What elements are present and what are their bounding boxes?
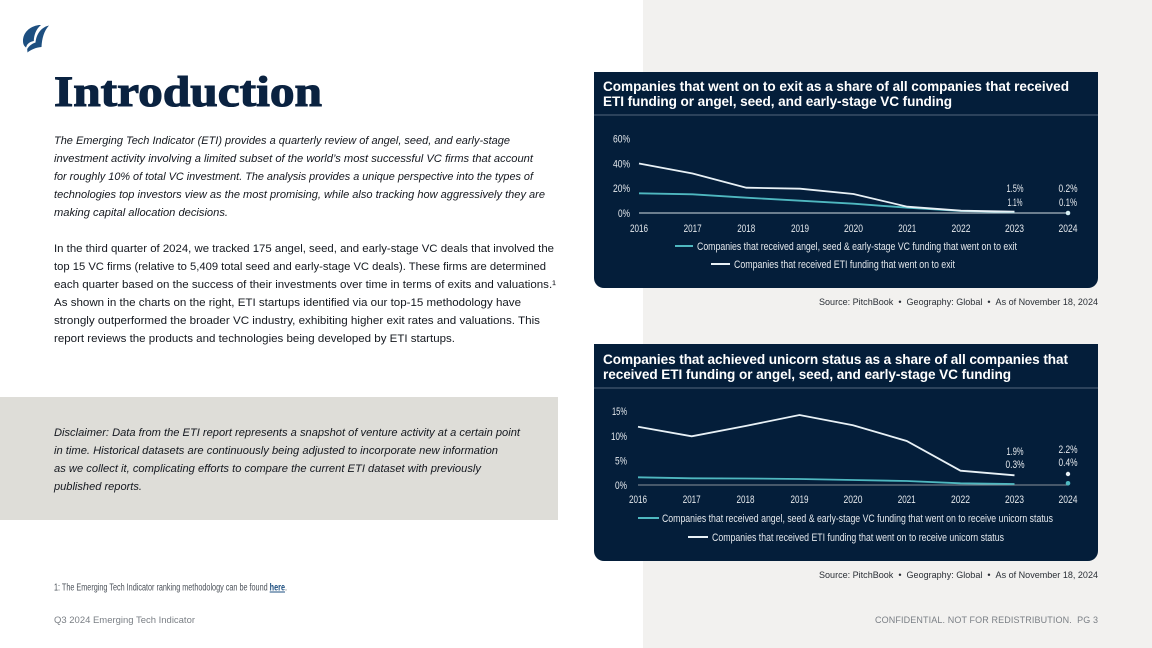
y axis labels: 5%	[615, 456, 627, 468]
data labels: 0.2%	[1058, 183, 1078, 195]
text block: italic introduction: The Emerging Tech Indicator (ETI) provides a quarterly review of angel, seed, and early-stage	[54, 135, 510, 147]
legend: Companies that received angel, seed & early-stage VC funding that went on to receive unicorn status	[662, 513, 1053, 525]
x axis labels: 2019	[790, 494, 808, 506]
data labels: 1.5%	[1006, 183, 1024, 195]
line chart: unicorn rates	[638, 415, 1070, 486]
y axis labels: 60%	[613, 134, 630, 146]
y axis labels	[613, 134, 630, 220]
text block: italic introduction: making capital allocation decisions.	[54, 207, 228, 219]
x axis labels	[629, 494, 1078, 506]
text block: italic introduction	[54, 135, 545, 219]
y axis labels: 10%	[611, 431, 627, 443]
y axis labels: 20%	[613, 183, 630, 195]
chart heading	[603, 79, 1069, 109]
chart heading	[603, 352, 1068, 382]
x axis labels: 2018	[737, 223, 755, 235]
data labels: 2.2%	[1058, 444, 1078, 456]
text block: third quarter summary	[54, 243, 556, 345]
footer: report name: Q3 2024 Emerging Tech Indicator	[54, 615, 195, 626]
y axis labels: 0%	[618, 208, 630, 220]
x axis labels: 2024	[1058, 494, 1078, 506]
data labels	[1006, 444, 1078, 471]
text block: third quarter summary: strongly outperformed the broader VC industry, exhibiting higher exit rates and valuations. This	[54, 315, 541, 327]
legend	[638, 513, 1053, 544]
footer: confidentiality and page number: CONFIDENTIAL. NOT FOR REDISTRIBUTION. PG 3	[875, 615, 1098, 625]
disclaimer text: as we collect it, complicating efforts to compare the current ETI dataset with previously	[54, 463, 483, 475]
x axis labels: 2016	[630, 223, 648, 235]
text block: third quarter summary: In the third quarter of 2024, we tracked 175 angel, seed, and early-stage VC deals that involved the	[54, 243, 554, 255]
data labels: 1.9%	[1006, 446, 1024, 458]
disclaimer text: published reports.	[53, 481, 142, 493]
text block: italic introduction: technologies top investors view as the most promising, while also tracking how aggressively they are	[54, 189, 545, 201]
text block: italic introduction: investment activity involving a limited subset of the world’s most successful VC firms that account	[54, 153, 534, 165]
legend	[675, 241, 1017, 271]
legend: Companies that received ETI funding that went on to exit	[734, 259, 955, 271]
source note: Source: PitchBook • Geography: Global • As of November 18, 2024	[819, 570, 1098, 581]
disclaimer text	[53, 427, 521, 493]
y axis labels	[611, 406, 627, 492]
data labels: 0.3%	[1006, 459, 1025, 471]
panel: disclaimer	[0, 397, 558, 520]
panel: unicorn share chart	[594, 344, 1098, 561]
x axis labels: 2017	[683, 494, 701, 506]
x axis labels: 2019	[791, 223, 809, 235]
data labels: 1.1%	[1008, 197, 1023, 209]
disclaimer text: in time. Historical datasets are continuously being adjusted to incorporate new information	[54, 445, 498, 457]
data labels: 0.1%	[1059, 197, 1077, 209]
x axis labels: 2022	[951, 494, 970, 506]
chart heading: received ETI funding or angel, seed, and early-stage VC funding	[603, 367, 1011, 382]
x axis labels: 2017	[684, 223, 702, 235]
data labels	[1006, 183, 1078, 209]
y axis labels: 0%	[615, 480, 627, 492]
x axis labels: 2022	[952, 223, 970, 235]
title: Introduction	[54, 69, 322, 116]
x axis labels: 2020	[844, 223, 863, 235]
right background panel	[643, 0, 1152, 648]
x axis labels	[630, 223, 1078, 235]
x axis labels: 2021	[898, 223, 916, 235]
text block: third quarter summary: each quarter based on the success of their investments over time in terms of exits and valuations.¹	[54, 279, 556, 291]
legend: Companies that received ETI funding that went on to receive unicorn status	[712, 532, 1004, 544]
x axis labels: 2023	[1005, 223, 1024, 235]
chart heading: ETI funding or angel, seed, and early-stage VC funding	[603, 94, 952, 109]
legend: Companies that received angel, seed & early-stage VC funding that went on to exit	[697, 241, 1017, 253]
text block: third quarter summary: report reviews the products and technologies being developed by ETI startups.	[54, 333, 455, 345]
text block: third quarter summary: top 15 VC firms (relative to 5,409 total seed and early-stage VC deals). These firms are determined	[54, 261, 546, 273]
x axis labels: 2021	[898, 494, 916, 506]
x axis labels: 2020	[844, 494, 862, 506]
chart heading: Companies that achieved unicorn status as a share of all companies that	[603, 352, 1068, 367]
x axis labels: 2024	[1058, 223, 1078, 235]
x axis labels: 2018	[736, 494, 754, 506]
source note: Source: PitchBook • Geography: Global • As of November 18, 2024	[819, 297, 1098, 308]
x axis labels: 2023	[1005, 494, 1024, 506]
y axis labels: 40%	[613, 158, 630, 170]
line chart: exit rates	[639, 164, 1070, 215]
icon: sail logo	[23, 25, 49, 52]
data labels: 0.4%	[1058, 457, 1078, 469]
text block: italic introduction: for roughly 10% of total VC investment. The analysis provides a unique perspective into the types of	[54, 171, 534, 183]
disclaimer text: Disclaimer: Data from the ETI report represents a snapshot of venture activity at a certain point	[54, 427, 521, 439]
text block: third quarter summary: As shown in the charts on the right, ETI startups identified via our top-15 methodology have	[54, 297, 521, 309]
panel: exit share chart	[594, 72, 1098, 288]
footnote: 1: The Emerging Tech Indicator ranking methodology can be found here.	[54, 582, 287, 594]
y axis labels: 15%	[612, 406, 627, 418]
x axis labels: 2016	[629, 494, 647, 506]
chart heading: Companies that went on to exit as a share of all companies that received	[603, 79, 1069, 94]
